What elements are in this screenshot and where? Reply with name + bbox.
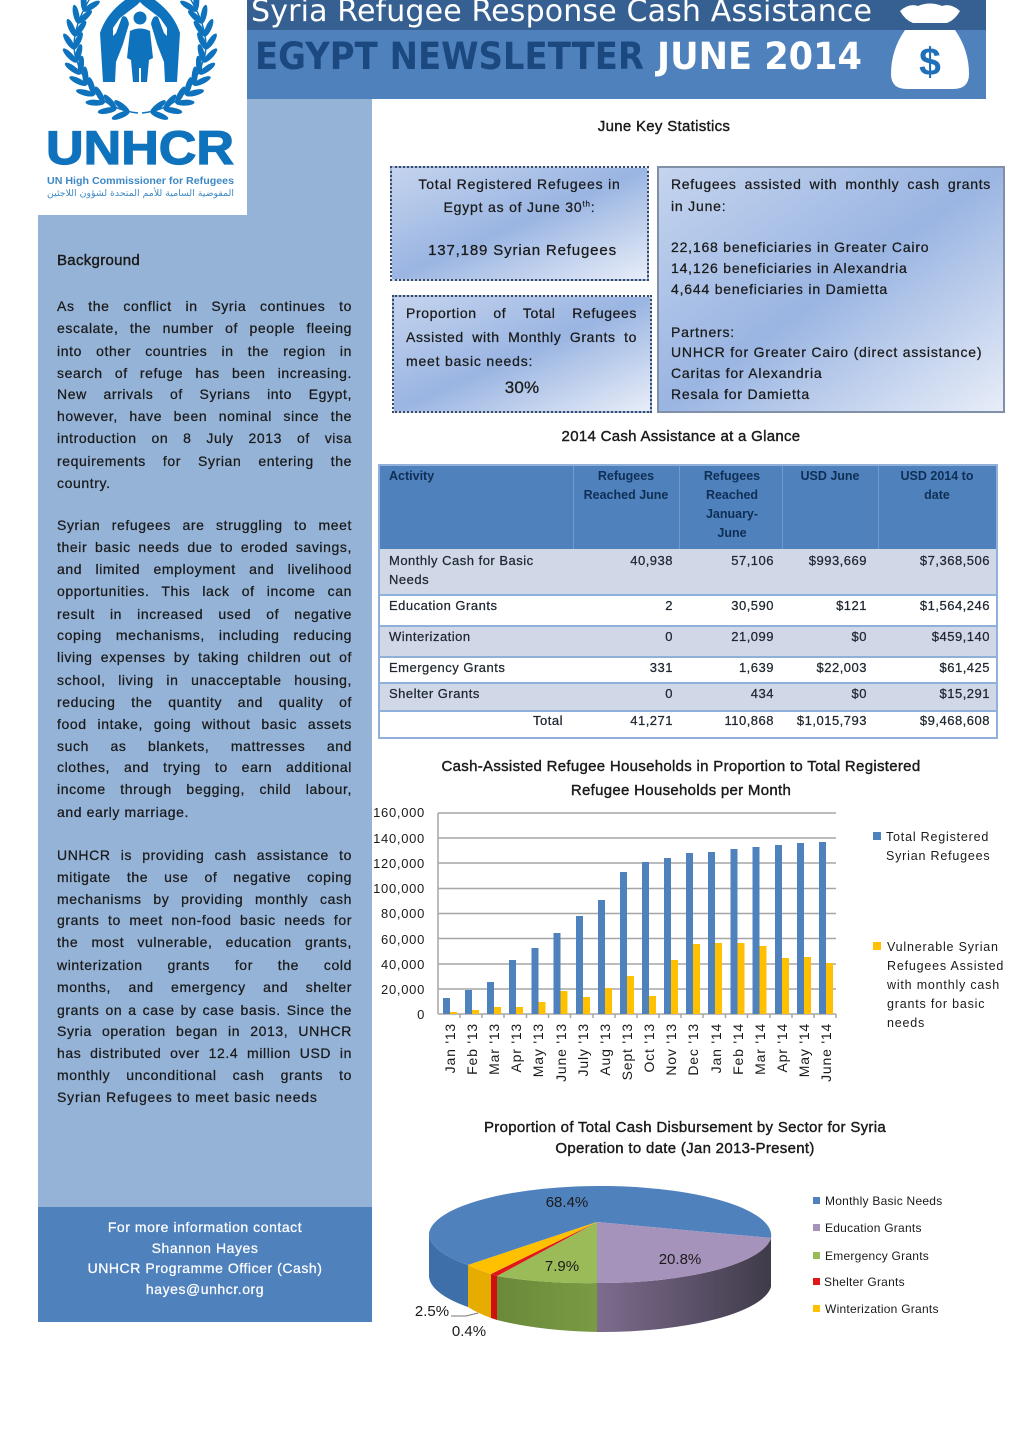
table row: monthly cash: 57,106 xyxy=(731,553,774,568)
y axis labels xyxy=(373,805,425,1022)
table header row: USD 2014 to xyxy=(901,469,973,483)
y axis labels: 0 xyxy=(417,1007,425,1022)
table row: shelter: $0 xyxy=(852,686,867,701)
y axis labels: 20,000 xyxy=(381,982,425,997)
x axis labels: Oct '13 xyxy=(641,1023,657,1073)
text block: background: months, and emergency and shelter xyxy=(57,979,352,995)
panel: total registered refugees: 137,189 Syrian Refugees xyxy=(428,242,617,259)
panel: proportion assisted: 30% xyxy=(505,378,539,397)
logo: UNHCR: المفوضية السامية للأمم المتحدة لشؤون اللاجئين xyxy=(47,187,234,199)
table row: total: Total xyxy=(533,713,563,728)
table header row: Activity xyxy=(389,469,434,483)
header title text xyxy=(251,0,872,78)
blue bars: total registered xyxy=(443,842,826,1014)
text block: background: Syrian Refugees to meet basic needs xyxy=(57,1089,318,1105)
table row: total: $1,015,793 xyxy=(797,713,867,728)
panel: contact information: Shannon Hayes xyxy=(152,1240,258,1256)
table row: shelter: $15,291 xyxy=(940,686,990,701)
table row: education: Education Grants xyxy=(389,598,497,613)
text block: background: grants on a case by case basis. Since the xyxy=(57,1002,352,1018)
table row: education xyxy=(378,596,998,627)
text block: background: living expenses by taking children out of xyxy=(57,649,352,665)
text block: background: their basic needs due to eroded savings, xyxy=(57,539,352,555)
table row: total: $9,468,608 xyxy=(920,713,990,728)
x axis labels xyxy=(442,1023,834,1082)
text block: background: clothes, and trying to earn additional xyxy=(57,759,352,775)
pie value labels: 68.4% xyxy=(546,1194,588,1211)
table row: winterization: $0 xyxy=(852,629,867,644)
text block: background: requirements for Syrian entering the xyxy=(57,453,352,469)
legend: pie chart: Monthly Basic Needs xyxy=(825,1194,942,1208)
text block: background: the most vulnerable, education grants, xyxy=(57,934,352,950)
text block: background: introduction on 8 July 2013 of visa xyxy=(57,430,352,446)
table row: monthly cash xyxy=(378,549,998,596)
x axis labels: Sept '13 xyxy=(619,1023,635,1080)
heading: bar chart title: Cash-Assisted Refugee Households in Proportion to Total Registered xyxy=(442,758,920,775)
logo: UNHCR: UN High Commissioner for Refugees xyxy=(47,176,234,187)
panel: total registered refugees: Total Registered Refugees in xyxy=(418,176,621,192)
text block: background: coping mechanisms, including reducing xyxy=(57,627,352,643)
x axis labels: June '14 xyxy=(818,1023,834,1082)
table row: emergency: 1,639 xyxy=(739,660,774,675)
x axis labels: May '14 xyxy=(796,1023,812,1077)
panel: refugees assisted with monthly cash grants: UNHCR for Greater Cairo (direct assistance) xyxy=(671,344,982,360)
panel: total registered refugees: Egypt as of June 30th: xyxy=(444,199,595,215)
x axis labels: May '13 xyxy=(530,1023,546,1077)
heading: cash assistance table: 2014 Cash Assistance at a Glance xyxy=(562,428,800,445)
panel: refugees assisted with monthly cash grants: 14,126 beneficiaries in Alexandria xyxy=(671,260,908,276)
bar chart: refugee households per month xyxy=(373,805,1004,1082)
panel: refugees assisted with monthly cash grants: Caritas for Alexandria xyxy=(671,365,822,381)
table header row: Reached xyxy=(706,488,758,502)
table row: shelter: Shelter Grants xyxy=(389,686,480,701)
text block: background: reducing the quantity and quality of xyxy=(57,694,352,710)
y axis labels: 100,000 xyxy=(373,881,425,896)
table header row: June xyxy=(717,526,747,540)
panel: refugees assisted with monthly cash grants: Refugees assisted with monthly cash grants xyxy=(671,176,991,192)
text block: background: income through begging, child labour, xyxy=(57,781,352,797)
table row: monthly cash: 40,938 xyxy=(630,553,673,568)
x axis labels: Dec '13 xyxy=(685,1023,701,1076)
title: Egypt Newsletter: EGYPT NEWSLETTER xyxy=(255,35,644,78)
logo: UNHCR: UNHCR xyxy=(46,121,234,174)
text block: background: result in increased used of negative xyxy=(57,606,352,622)
table header row xyxy=(378,464,998,549)
panel: refugees assisted with monthly cash grants: 4,644 beneficiaries in Damietta xyxy=(671,281,888,297)
panel: refugees assisted with monthly cash grants: in June: xyxy=(671,198,726,214)
pie side walls xyxy=(429,1233,771,1332)
legend: bar chart: Vulnerable Syrian xyxy=(887,940,999,954)
pie chart: disbursement by sector xyxy=(415,1186,942,1340)
table row: total xyxy=(378,712,998,739)
y axis labels: 160,000 xyxy=(373,805,425,820)
sidebar panel xyxy=(38,98,372,1208)
text block: background: however, have been nominal since the xyxy=(57,408,352,424)
table row: total: 110,868 xyxy=(724,713,774,728)
x axis labels: Aug '13 xyxy=(597,1023,613,1076)
yellow bars: assisted xyxy=(450,943,833,1014)
panel: refugees assisted with monthly cash grants xyxy=(657,166,1005,413)
text block: background: escalate, the number of people fleeing xyxy=(57,320,352,336)
table header row: January- xyxy=(706,507,758,521)
table row: shelter: 434 xyxy=(751,686,774,701)
pie value labels: 7.9% xyxy=(545,1258,579,1275)
table row: winterization: $459,140 xyxy=(932,629,990,644)
y axis labels: 60,000 xyxy=(381,932,425,947)
x axis labels: June '13 xyxy=(553,1023,569,1082)
table header row: USD June xyxy=(800,469,860,483)
text block: background: and early marriage. xyxy=(57,804,189,820)
panel: total registered refugees xyxy=(390,166,649,281)
table row: winterization: 0 xyxy=(665,629,673,644)
y axis labels: 40,000 xyxy=(381,957,425,972)
table row: education: $1,564,246 xyxy=(920,598,990,613)
panel: contact information: hayes@unhcr.org xyxy=(146,1281,264,1297)
table: 2014 cash assistance xyxy=(378,464,998,739)
table row: emergency: $22,003 xyxy=(816,660,867,675)
logo: UNHCR xyxy=(38,0,247,215)
heading: pie chart title: Operation to date (Jan 2013-Present) xyxy=(555,1140,815,1157)
table row: shelter xyxy=(378,684,998,712)
legend: pie chart xyxy=(813,1194,942,1316)
table header row: date xyxy=(924,488,950,502)
text block: background: mitigate the use of negative coping xyxy=(57,869,352,885)
table row: monthly cash: Needs xyxy=(389,572,429,587)
panel: refugees assisted with monthly cash grants: Partners: xyxy=(671,324,735,340)
table row: emergency xyxy=(378,658,998,684)
panel: refugees assisted with monthly cash grants: 22,168 beneficiaries in Greater Cairo xyxy=(671,239,929,255)
heading: pie chart title xyxy=(484,1119,886,1157)
text block: background: As the conflict in Syria continues to xyxy=(57,298,352,314)
heading: pie chart title: Proportion of Total Cash Disbursement by Sector for Syria xyxy=(484,1119,886,1136)
table row: monthly cash: Monthly Cash for Basic xyxy=(389,553,534,568)
x axis labels: Apr '13 xyxy=(508,1023,524,1073)
icon: money bag: $ xyxy=(919,41,941,84)
table row: emergency: $61,425 xyxy=(940,660,990,675)
panel: contact information xyxy=(38,1207,372,1322)
text block: background: such as blankets, mattresses and xyxy=(57,738,352,754)
legend: bar chart: Syrian Refugees xyxy=(886,849,990,863)
table row: education: 30,590 xyxy=(731,598,774,613)
text block: background: Syrian refugees are struggling to meet xyxy=(57,517,352,533)
table row: emergency: 331 xyxy=(650,660,673,675)
panel: proportion assisted: meet basic needs: xyxy=(406,353,533,369)
table row: education: $121 xyxy=(836,598,867,613)
text block: background: Syria operation began in 2013, UNHCR xyxy=(57,1023,352,1039)
heading: bar chart title: Refugee Households per Month xyxy=(571,782,791,799)
title: June 2014: JUNE 2014 xyxy=(654,35,862,78)
table row: monthly cash: $993,669 xyxy=(809,553,867,568)
panel: proportion assisted: Assisted with Monthly Grants to xyxy=(406,329,637,345)
table header row: Refugees xyxy=(598,469,654,483)
text block: background: grants to meet non-food basic needs for xyxy=(57,912,352,928)
pie value labels: 2.5% xyxy=(415,1303,449,1320)
x axis labels: Jan '13 xyxy=(442,1023,458,1073)
panel: proportion assisted xyxy=(392,295,652,413)
text block: background: and limited employment and livelihood xyxy=(57,561,352,577)
x axis labels: Nov '13 xyxy=(663,1023,679,1076)
legend: bar chart: with monthly cash xyxy=(886,978,1000,992)
x axis labels: Mar '14 xyxy=(752,1023,768,1075)
legend: pie chart: Education Grants xyxy=(825,1221,922,1235)
table row: winterization: Winterization xyxy=(389,629,471,644)
table header row: Refugees xyxy=(704,469,760,483)
table row: shelter: 0 xyxy=(665,686,673,701)
legend: pie chart: Shelter Grants xyxy=(824,1275,905,1289)
table header row: Reached June xyxy=(584,488,668,502)
text block: background: country. xyxy=(57,475,111,491)
y axis labels: 80,000 xyxy=(381,906,425,921)
table row: total: 41,271 xyxy=(630,713,673,728)
heading: bar chart title xyxy=(442,758,920,799)
panel: refugees assisted with monthly cash grants: Resala for Damietta xyxy=(671,386,810,402)
table row: emergency: Emergency Grants xyxy=(389,660,505,675)
x axis labels: Apr '14 xyxy=(774,1023,790,1073)
panel: contact information: For more information contact xyxy=(108,1219,302,1235)
heading: June key statistics: June Key Statistics xyxy=(598,118,730,135)
y axis labels: 140,000 xyxy=(373,831,425,846)
panel: contact information: UNHCR Programme Officer (Cash) xyxy=(88,1260,322,1276)
legend: bar chart: grants for basic xyxy=(887,997,985,1011)
text block: background: monthly unconditional cash grants to xyxy=(57,1067,352,1083)
text block: background: New arrivals of Syrians into Egypt, xyxy=(57,386,352,402)
text block: background: winterization grants for the cold xyxy=(57,957,352,973)
table row: winterization: 21,099 xyxy=(731,629,774,644)
legend: pie chart: Emergency Grants xyxy=(825,1249,929,1263)
text block: background: mechanisms by providing monthly cash xyxy=(57,891,352,907)
text block: background: UNHCR is providing cash assistance to xyxy=(57,847,352,863)
icon: money bag xyxy=(891,4,969,89)
pie value labels: 20.8% xyxy=(659,1251,701,1268)
x axis labels: Jan '14 xyxy=(708,1023,724,1073)
text block: background: school, living in unacceptable housing, xyxy=(57,672,352,688)
y axis labels: 120,000 xyxy=(373,856,425,871)
text block: background xyxy=(56,252,352,1106)
table row: winterization xyxy=(378,627,998,658)
table row: education: 2 xyxy=(665,598,673,613)
legend: bar chart: needs xyxy=(887,1016,925,1030)
x axis labels: Feb '13 xyxy=(464,1023,480,1075)
table row: monthly cash: $7,368,506 xyxy=(920,553,990,568)
text block: background: search of refuge has been increasing. xyxy=(57,365,352,381)
header banner xyxy=(247,0,986,99)
header dark strip xyxy=(247,0,986,30)
legend: bar chart: Total Registered xyxy=(886,830,989,844)
legend: bar chart: Refugees Assisted xyxy=(887,959,1004,973)
text block: background: food intake, going without basic assets xyxy=(57,716,352,732)
pie value labels: 0.4% xyxy=(452,1323,486,1340)
legend: pie chart: Winterization Grants xyxy=(825,1302,939,1316)
text block: background: has distributed over 12.4 million USD in xyxy=(57,1045,352,1061)
pie value labels xyxy=(415,1194,701,1340)
pie top slices xyxy=(429,1186,771,1283)
heading: background: Background xyxy=(57,252,140,269)
text block: background: opportunities. This lack of income can xyxy=(57,583,352,599)
x axis labels: Feb '14 xyxy=(730,1023,746,1075)
text block: background: into other countries in the region in xyxy=(57,343,352,359)
x axis labels: Mar '13 xyxy=(486,1023,502,1075)
legend: bar chart xyxy=(873,830,1004,1030)
panel: proportion assisted: Proportion of Total Refugees xyxy=(406,305,637,321)
x axis labels: July '13 xyxy=(575,1023,591,1076)
